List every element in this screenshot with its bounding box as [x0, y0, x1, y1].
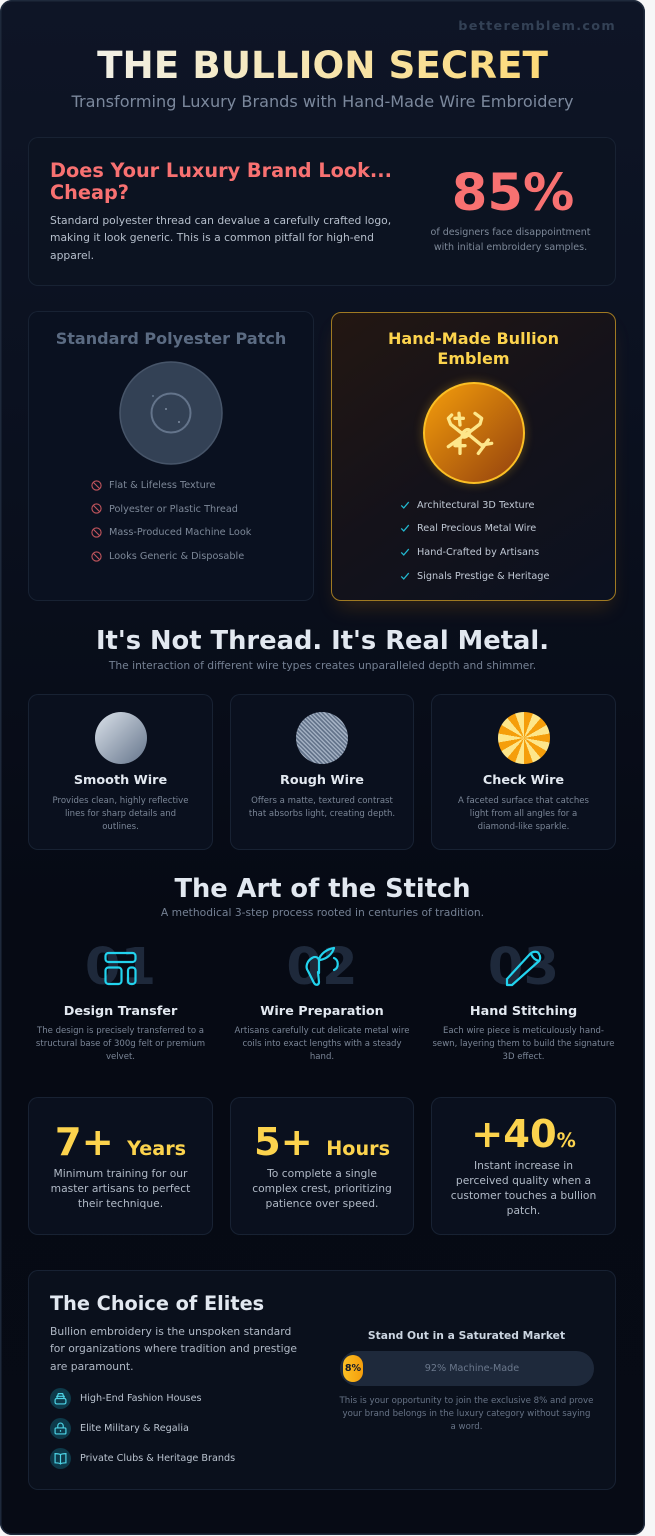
- step 3 title: Hand Stitching: [470, 1004, 577, 1019]
- stat text: their technique.: [78, 1196, 163, 1210]
- smooth wire description: [52, 796, 188, 832]
- step 1 description: velvet.: [106, 1052, 135, 1062]
- elites text: are paramount.: [50, 1360, 134, 1372]
- panel: smooth wire: [28, 694, 213, 850]
- bullion heading: Hand-Made Bullion: [388, 329, 559, 348]
- stat text: [51, 1166, 190, 1210]
- benefit 2: Real Precious Metal Wire: [417, 523, 536, 534]
- rough wire description: [249, 796, 395, 819]
- elites text: for organizations where tradition and prestige: [50, 1342, 297, 1355]
- step 2 description: coils into exact lengths with a steady: [242, 1039, 402, 1049]
- market description: your brand belongs in the luxury category without saying: [343, 1409, 590, 1419]
- title: THE BULLION SECRET: [97, 43, 548, 87]
- stat text: patience over speed.: [266, 1196, 378, 1210]
- stat text: perceived quality when a: [456, 1174, 591, 1186]
- stat: years of training: [28, 1097, 213, 1235]
- step number 01: 01: [85, 937, 156, 997]
- elites text: Bullion embroidery is the unspoken standard: [50, 1324, 291, 1338]
- panel: standard polyester patch: [28, 311, 314, 601]
- icon: lock: [50, 1418, 71, 1438]
- icon: layout: [104, 952, 137, 986]
- item label: High-End Fashion Houses: [80, 1393, 202, 1404]
- stat text: complex crest, prioritizing: [252, 1182, 392, 1194]
- item label: Private Clubs & Heritage Brands: [80, 1453, 235, 1464]
- statistic caption: [430, 226, 590, 252]
- stat: perceived quality: [431, 1097, 616, 1235]
- elites text: [50, 1324, 297, 1372]
- step 1 description: structural base of 300g felt or premium: [36, 1039, 205, 1049]
- benefit 4: Signals Prestige & Heritage: [417, 571, 549, 582]
- step 1: design transfer: [36, 937, 205, 1062]
- site watermark: betteremblem.com: [458, 19, 616, 34]
- statistic caption: with initial embroidery samples.: [434, 242, 587, 252]
- heading: art of the stitch: The Art of the Stitch: [174, 874, 471, 904]
- check wire description: light from all angles for a: [470, 809, 577, 819]
- step number 03: 03: [488, 937, 559, 997]
- 8% gold segment: [343, 1355, 363, 1382]
- problem text: Standard polyester thread can devalue a carefully crafted logo,: [50, 214, 391, 226]
- heading: real metal: It's Not Thread. It's Real Metal.: [96, 626, 549, 656]
- title: [0, 41, 645, 89]
- step 3: hand stitching: [432, 937, 615, 1062]
- market description: a word.: [451, 1422, 482, 1432]
- smooth wire description: outlines.: [102, 822, 139, 832]
- polyester drawbacks list: [91, 480, 252, 562]
- problem text: apparel.: [50, 248, 94, 262]
- elite item: military: [50, 1418, 189, 1439]
- icon: gold emblem: [422, 382, 524, 484]
- benefit 3: Hand-Crafted by Artisans: [417, 547, 539, 558]
- step 2 description: Artisans carefully cut delicate metal wire: [235, 1026, 409, 1036]
- polyester heading: Standard Polyester Patch: [56, 329, 286, 348]
- stat text: Instant increase in: [474, 1158, 573, 1172]
- check wire title: Check Wire: [483, 773, 564, 788]
- smooth wire title: Smooth Wire: [74, 773, 167, 788]
- market heading: Stand Out in a Saturated Market: [368, 1329, 565, 1342]
- step 3 description: 3D effect.: [503, 1052, 544, 1062]
- stat value 7+ years: 7+ Years: [55, 1120, 186, 1164]
- 92% label: 92% Machine-Made: [425, 1363, 519, 1374]
- statistic caption: of designers face disappointment: [430, 226, 590, 238]
- step number 02: 02: [286, 937, 358, 997]
- step 1 description: The design is precisely transferred to a: [37, 1026, 204, 1036]
- check wire description: A faceted surface that catches: [458, 796, 589, 806]
- item label: Elite Military & Regalia: [80, 1423, 189, 1434]
- check wire description: [458, 796, 589, 832]
- real metal subheading: The interaction of different wire types creates unparalleled depth and shimmer.: [109, 659, 536, 672]
- stat text: Minimum training for our: [54, 1166, 187, 1180]
- problem text: [50, 214, 391, 262]
- elites heading: The Choice of Elites: [50, 1292, 264, 1315]
- smooth wire description: lines for sharp details and: [65, 809, 176, 819]
- step 2 title: Wire Preparation: [260, 1004, 384, 1019]
- market description: This is your opportunity to join the exclusive 8% and prove: [340, 1396, 593, 1406]
- swatch: smooth wire: [94, 712, 146, 764]
- check wire description: diamond-like sparkle.: [478, 822, 569, 832]
- bullion benefits list: [400, 500, 549, 582]
- elite item: fashion houses: [50, 1388, 202, 1409]
- stat text: [451, 1158, 596, 1216]
- panel: check wire: [431, 694, 616, 850]
- swatch: check wire: [498, 712, 550, 764]
- market description: [340, 1396, 593, 1432]
- rough wire description: Offers a matte, textured contrast: [251, 796, 393, 806]
- panel: problem statement: [28, 137, 616, 286]
- smooth wire description: Provides clean, highly reflective: [52, 796, 188, 806]
- bullion heading: [388, 329, 559, 368]
- step 1 title: Design Transfer: [64, 1004, 177, 1019]
- bullion heading: Emblem: [437, 349, 510, 368]
- 85% statistic: 85%: [452, 163, 574, 223]
- step 2 description: [234, 1026, 410, 1062]
- problem text: making it look generic. This is a common pitfall for high-end: [50, 231, 374, 244]
- icon: flat polyester patch: [119, 361, 223, 465]
- panel: rough wire: [230, 694, 414, 850]
- drawback 3: Mass-Produced Machine Look: [109, 527, 251, 538]
- step 2: wire preparation: [234, 937, 410, 1062]
- 8% gold segment: 8%: [345, 1363, 361, 1374]
- problem heading: Cheap?: [50, 180, 129, 204]
- rough wire description: that absorbs light, creating depth.: [249, 809, 395, 819]
- stat text: To complete a single: [267, 1166, 377, 1180]
- elite item: clubs: [50, 1448, 235, 1469]
- market share bar: [340, 1351, 594, 1386]
- panel: hand-made bullion emblem: [331, 312, 616, 601]
- stat text: master artisans to perfect: [51, 1182, 190, 1194]
- subtitle: Transforming Luxury Brands with Hand-Made Wire Embroidery: [72, 92, 574, 111]
- drawback 1: Flat & Lifeless Texture: [109, 480, 215, 491]
- step 3 description: Each wire piece is meticulously hand-: [443, 1026, 604, 1036]
- icon: pencil: [506, 950, 542, 986]
- icon: bag: [50, 1388, 71, 1408]
- icon: book: [50, 1448, 71, 1468]
- drawback 2: Polyester or Plastic Thread: [109, 504, 238, 515]
- rough wire title: Rough Wire: [280, 773, 364, 788]
- stat text: [252, 1166, 392, 1210]
- swatch: rough wire: [296, 712, 348, 764]
- step 1 description: [36, 1026, 205, 1062]
- panel: the choice of elites: [28, 1270, 616, 1490]
- problem heading: [50, 159, 392, 204]
- benefit 1: Architectural 3D Texture: [417, 500, 534, 511]
- step 3 description: sewn, layering them to build the signature: [432, 1039, 615, 1049]
- step 3 description: [432, 1026, 615, 1062]
- stitch subheading: A methodical 3-step process rooted in centuries of tradition.: [161, 906, 484, 919]
- problem heading: Does Your Luxury Brand Look...: [50, 159, 392, 182]
- icon: wire tool: [306, 946, 339, 986]
- stat value +40%: +40%: [471, 1112, 576, 1157]
- step 2 description: hand.: [310, 1052, 334, 1062]
- stat text: patch.: [507, 1204, 540, 1216]
- stat value 5+ hours: 5+ Hours: [254, 1120, 390, 1164]
- drawback 4: Looks Generic & Disposable: [109, 551, 244, 562]
- stat: hours per crest: [230, 1097, 414, 1235]
- stat text: customer touches a bullion: [451, 1188, 596, 1202]
